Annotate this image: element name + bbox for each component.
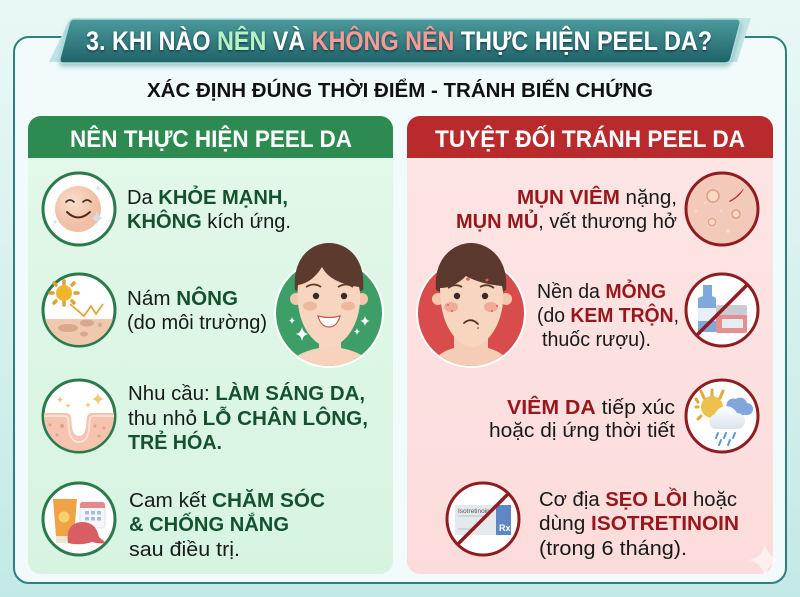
text: inflamed acne: MỤN VIÊM nặng, (517, 185, 677, 209)
text: thin skin: thuốc rượu). (542, 329, 651, 351)
text: inflamed acne (456, 185, 677, 233)
title text: 3. KHI NÀO NÊN VÀ KHÔNG NÊN THỰC HIỆN PEEL DA? (86, 25, 712, 56)
red panel header (407, 116, 773, 158)
text: thin skin (537, 279, 679, 351)
watermark sparkle (749, 544, 781, 577)
text: brightening needs: thu nhỏ LỖ CHÂN LÔNG, (128, 406, 368, 430)
text: sun care commitment: Cam kết CHĂM SÓC (129, 488, 325, 512)
red header text: TUYỆT ĐỐI TRÁNH PEEL DA (435, 125, 745, 153)
text: healthy skin: KHÔNG kích ứng. (127, 209, 291, 233)
text: shallow melasma: (do môi trường) (127, 312, 267, 334)
illustration: happy woman (275, 243, 383, 372)
icon: no isotretinoin: Isotretinoin (458, 508, 490, 515)
text: brightening needs (128, 382, 368, 454)
text: thin skin: Nền da MỎNG (537, 279, 666, 303)
icon: sunscreen, calendar and cap (43, 483, 115, 555)
text: brightening needs: TRẺ HÓA. (128, 430, 222, 454)
icon: inflamed skin (686, 173, 758, 245)
green panel header (28, 116, 393, 158)
icon: weather (686, 380, 758, 452)
subtitle: XÁC ĐỊNH ĐÚNG THỜI ĐIỂM - TRÁNH BIẾN CHỨNG (147, 78, 653, 102)
text: keloid or isotretinoin (539, 487, 739, 560)
text: keloid or isotretinoin: Cơ địa SẸO LỒI hoặc (539, 487, 737, 511)
panel: must avoid peel (407, 116, 773, 574)
text: contact dermatitis (489, 395, 675, 442)
text: sun care commitment: & CHỐNG NẮNG (129, 512, 289, 536)
text: keloid or isotretinoin: (trong 6 tháng). (539, 538, 687, 560)
text: sun care commitment (129, 488, 325, 561)
panel: should do peel (28, 116, 393, 574)
text: contact dermatitis: hoặc dị ứng thời tiết (489, 420, 675, 442)
text: shallow melasma: Nám NÔNG (127, 286, 238, 310)
icon: no isotretinoin (447, 483, 519, 555)
text: brightening needs: Nhu cầu: LÀM SÁNG DA, (128, 382, 365, 405)
icon: no isotretinoin: Rx (499, 523, 511, 533)
text: keloid or isotretinoin: dùng ISOTRETINOIN (539, 513, 739, 535)
text: shallow melasma (127, 286, 267, 334)
text: healthy skin: Da KHỎE MẠNH, (127, 185, 288, 209)
icon: no mixed creams (686, 274, 758, 346)
illustration: woman with acne (417, 243, 525, 372)
text: thin skin: (do KEM TRỘN, (537, 303, 679, 327)
text: contact dermatitis: VIÊM DA tiếp xúc (507, 395, 675, 419)
text: inflamed acne: MỤN MỦ, vết thương hở (456, 209, 677, 233)
icon: shallow melasma (40, 274, 120, 349)
title banner (49, 18, 751, 63)
text: sun care commitment: sau điều trị. (129, 539, 240, 561)
icon: healthy smiling skin (43, 173, 115, 245)
icon: pore and bright skin (42, 378, 116, 454)
text: healthy skin (127, 185, 291, 233)
green header text: NÊN THỰC HIỆN PEEL DA (70, 125, 352, 153)
